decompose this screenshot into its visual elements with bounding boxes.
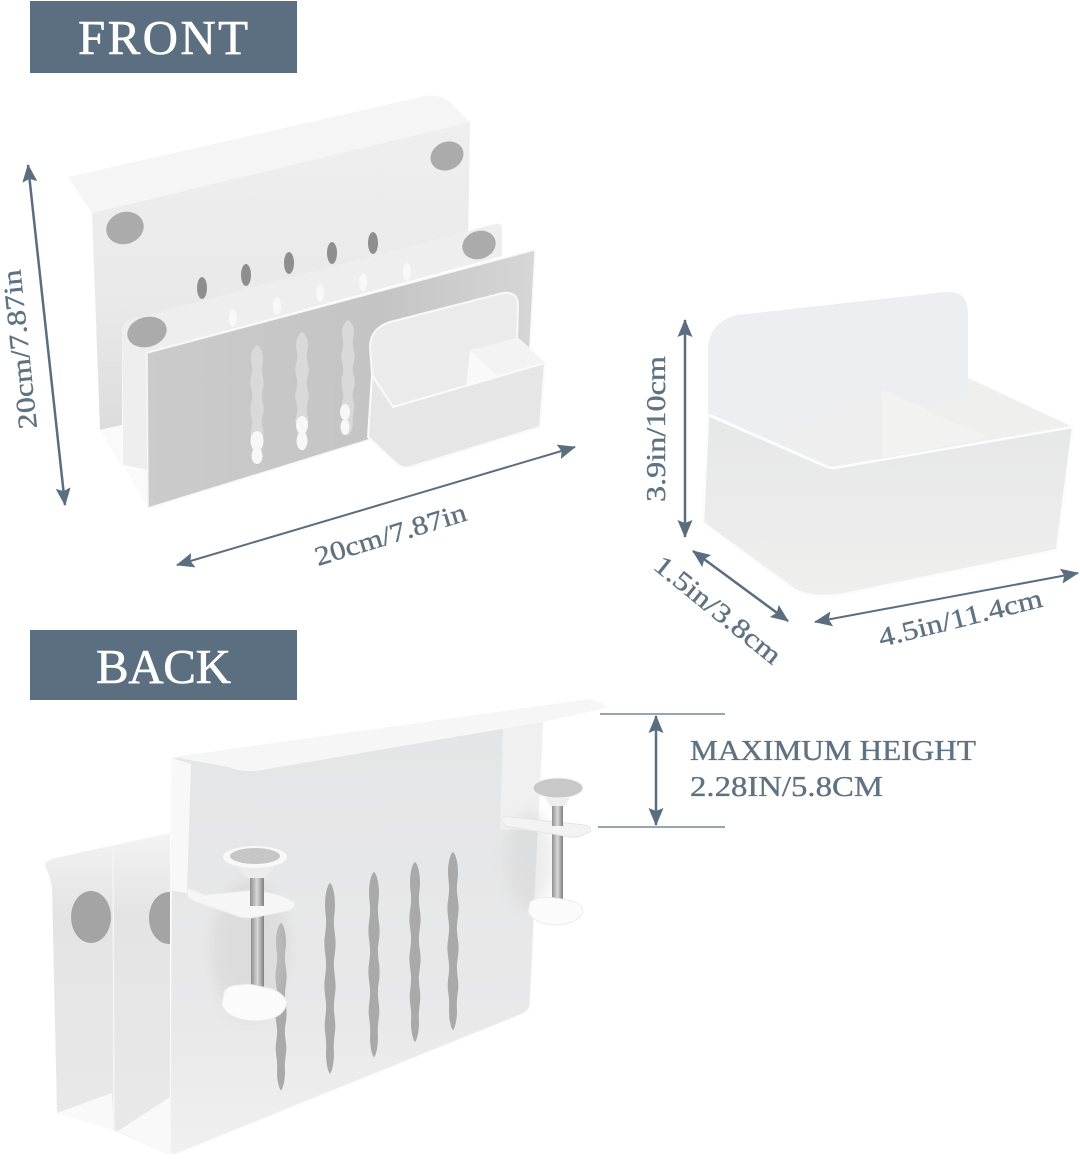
pen holder: divider and right compartment [470,338,545,378]
dimension: holder depth arrow [693,551,788,621]
wing knob [528,897,583,925]
product: pen holder [703,292,1073,596]
interior compartments [708,378,1073,468]
dimension: clamp opening guides [598,714,725,827]
hanging slots on back panel [197,232,378,299]
pressure disc [235,864,276,878]
right clamp [501,778,591,925]
wavy cut-outs in front panel [250,320,355,464]
front and left faces [703,415,1073,596]
label: front height: 20cm/7.87in [0,268,43,431]
lower threaded rod [251,912,264,996]
label: holder width: 4.5in/11.4cm [875,583,1045,653]
faint slots on middle panel [229,263,411,327]
dimension: holder height arrow [684,320,686,537]
mesh pads [71,891,170,944]
right side strip [500,722,543,830]
heading: FRONT: FRONT [78,10,248,65]
main panel [170,722,543,1154]
lower threaded rod [552,832,563,902]
product: front view organizer [68,96,545,508]
upper threaded rod [552,800,563,826]
wing knob [222,984,287,1021]
soft shadow [212,880,288,1020]
back panel [92,122,470,430]
pen holder: back plate and interior [370,293,545,407]
soft shadow [506,810,554,910]
cut-out slots [275,852,459,1090]
label: maximum height: MAXIMUM HEIGHT [690,736,976,767]
mesh pads on middle panel [124,226,500,352]
dimension: clamp opening arrow [655,716,657,825]
label: holder depth: 1.5in/3.8cm [648,549,788,670]
upper threaded rod [250,868,264,906]
pen holder: body [368,363,545,468]
label: holder height: 3.9in/10cm [641,356,671,502]
heading: BACK: BACK [96,639,231,694]
clamp plate [501,817,591,837]
product: back view organizer [45,699,606,1155]
front panel [147,250,535,508]
mesh pads on back panel [102,136,468,249]
heading: FRONT [30,1,297,73]
label: maximum height: 2.28IN/5.8CM [690,772,883,803]
middle panel [122,224,502,470]
dimension: front width arrow [177,447,575,565]
top lip [173,699,606,771]
white base floors [57,1093,170,1155]
clamp plate [187,888,295,918]
back plate [708,292,968,415]
rear folder panels [45,833,170,1155]
dimension: holder width arrow [815,573,1078,622]
heading: BACK [30,630,297,700]
left bracket strip [170,758,191,893]
white base floors [100,425,148,508]
pressure disc [543,794,572,806]
dimension: front height arrow [28,165,65,505]
top lip [68,96,470,213]
label: maximum height [690,736,976,803]
left clamp [187,846,295,1021]
label: front width: 20cm/7.87in [311,497,470,572]
